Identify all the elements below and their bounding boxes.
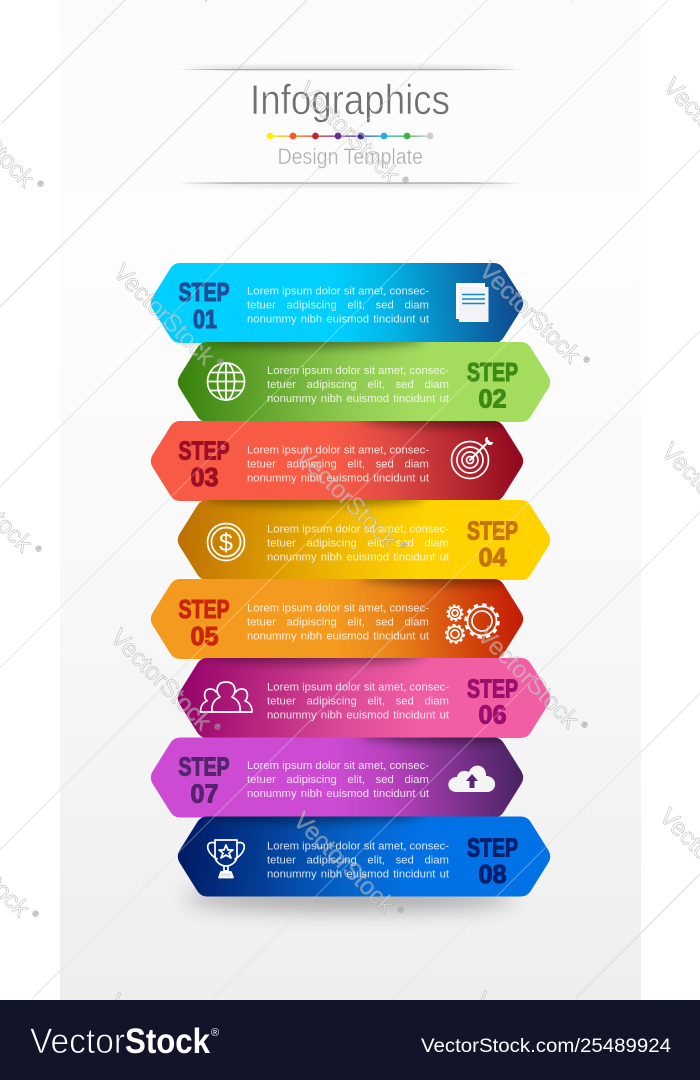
step label 06: STEP	[467, 674, 518, 704]
step label 04	[467, 516, 518, 572]
step label 07	[178, 752, 230, 808]
body text 01: nonummy nibh euismod tincidunt ut	[247, 314, 430, 326]
bottom rule	[177, 182, 523, 187]
footer logo: ®	[211, 1027, 219, 1039]
step label 08	[467, 832, 518, 889]
icon: dollar coin	[208, 524, 244, 560]
heading: Infographics	[250, 76, 450, 123]
step label 02: STEP	[467, 357, 518, 387]
watermarks: ®	[579, 720, 590, 730]
body text 03: tetuer adipiscing elit, sed diam	[247, 458, 429, 470]
body text 04: Lorem ipsum dolor sit amet, consec-	[267, 524, 449, 536]
body text 06	[267, 682, 450, 722]
footer url: VectorStock.com/25489924	[421, 1036, 671, 1057]
step label 05: 05	[190, 621, 218, 651]
watermarks: VectorStock	[474, 257, 585, 369]
icon: dollar coin: $	[219, 529, 233, 557]
step label 04: 04	[478, 542, 507, 572]
step label 03	[178, 436, 230, 492]
body text 04	[267, 524, 450, 564]
body text 07: nonummy nibh euismod tincidunt ut	[247, 788, 430, 800]
body text 08: Lorem ipsum dolor sit amet, consec-	[267, 840, 449, 852]
step 03 ribbon	[150, 421, 524, 501]
step label 07: STEP	[178, 752, 230, 782]
ribbon shape 05	[150, 579, 524, 659]
step label 06: 06	[478, 700, 506, 730]
step label 07: 07	[190, 778, 218, 808]
ground shadow	[185, 885, 515, 911]
body text 08	[267, 840, 450, 880]
background panel	[60, 0, 641, 1000]
body text 01: tetuer adipiscing elit, sed diam	[247, 300, 429, 312]
footer bar	[0, 1000, 700, 1080]
watermarks: ®	[30, 909, 41, 919]
ribbon shape 06	[178, 658, 550, 738]
body text 03: nonummy nibh euismod tincidunt ut	[247, 472, 430, 484]
title block	[177, 66, 523, 187]
body text 08: nonummy nibh euismod tincidunt ut	[267, 868, 450, 880]
body text 06: tetuer adipiscing elit, sed diam	[267, 696, 449, 708]
watermarks: VectorStock	[105, 624, 216, 736]
watermarks: ®	[33, 544, 44, 554]
body text 05: Lorem ipsum dolor sit amet, consec-	[247, 603, 429, 615]
ribbon shape 02	[178, 342, 550, 422]
body text 07: Lorem ipsum dolor sit amet, consec-	[247, 760, 429, 772]
body text 08: tetuer adipiscing elit, sed diam	[267, 854, 449, 866]
icon: people	[200, 682, 252, 712]
step 06 ribbon	[178, 658, 550, 738]
body text 02: Lorem ipsum dolor sit amet, consec-	[267, 365, 449, 377]
step 07 ribbon	[150, 738, 524, 818]
step 08 ribbon	[178, 816, 550, 896]
body text 07	[247, 760, 430, 800]
body text 02: tetuer adipiscing elit, sed diam	[267, 379, 449, 391]
step label 03: STEP	[178, 436, 230, 466]
ribbon shape 01	[151, 263, 523, 343]
ribbon shape 08	[178, 816, 550, 896]
body text 05	[247, 603, 430, 643]
step label 01: 01	[193, 304, 217, 334]
step 05 ribbon	[150, 579, 524, 659]
step 02 ribbon	[178, 342, 550, 422]
step label 04: STEP	[467, 516, 518, 546]
icon: document	[456, 283, 488, 322]
body text 04: tetuer adipiscing elit, sed diam	[267, 538, 449, 550]
icon: target	[452, 438, 492, 478]
watermarks: ®	[35, 179, 46, 189]
watermarks: VectorStock	[293, 77, 404, 189]
ribbon shape 07	[150, 738, 524, 818]
watermarks: VectorStock	[288, 807, 399, 919]
icon: cloud upload	[448, 766, 495, 792]
watermarks: ®	[581, 355, 592, 365]
body text 05: tetuer adipiscing elit, sed diam	[247, 617, 429, 629]
body text 02	[267, 365, 450, 405]
body text 03	[247, 444, 430, 484]
ribbon shape 04	[178, 500, 550, 580]
ribbon shape 03	[150, 421, 524, 501]
subtitle: Design Template	[278, 144, 423, 169]
body text 06: nonummy nibh euismod tincidunt ut	[267, 710, 450, 722]
step label 01	[178, 277, 230, 334]
body text 05: nonummy nibh euismod tincidunt ut	[247, 631, 430, 643]
step label 05	[178, 594, 230, 651]
step label 03: 03	[190, 462, 218, 492]
icon: trophy	[208, 840, 244, 878]
body text 03: Lorem ipsum dolor sit amet, consec-	[247, 444, 429, 456]
step label 08: STEP	[467, 832, 518, 862]
step label 08: 08	[478, 859, 506, 889]
step label 02	[467, 357, 518, 414]
icon: gears	[446, 604, 498, 643]
step label 06	[467, 674, 518, 730]
body text 07: tetuer adipiscing elit, sed diam	[247, 774, 429, 786]
step label 05: STEP	[178, 594, 230, 624]
step 04 ribbon	[178, 500, 550, 580]
body text 04: nonummy nibh euismod tincidunt ut	[267, 552, 450, 564]
body text 01	[247, 286, 430, 326]
step label 02: 02	[478, 384, 506, 414]
watermarks: ®	[215, 357, 226, 367]
coloured dot timeline	[267, 133, 433, 139]
top rule	[177, 66, 523, 70]
body text 02: nonummy nibh euismod tincidunt ut	[267, 393, 450, 405]
body text 06: Lorem ipsum dolor sit amet, consec-	[267, 682, 449, 694]
watermarks: ®	[398, 540, 409, 550]
step label 01: STEP	[178, 277, 230, 307]
watermarks: ®	[400, 175, 411, 185]
watermarks: VectorStock	[472, 622, 583, 734]
step 01 ribbon	[151, 263, 523, 343]
footer logo: Stock	[125, 1022, 210, 1061]
watermarks: VectorStock	[291, 442, 402, 554]
body text 01: Lorem ipsum dolor sit amet, consec-	[247, 286, 429, 298]
footer logo: Vector	[30, 1022, 125, 1061]
watermarks: ®	[395, 905, 406, 915]
watermarks: ®	[212, 722, 223, 732]
icon: globe	[208, 363, 244, 400]
watermarks: VectorStock	[108, 259, 219, 371]
